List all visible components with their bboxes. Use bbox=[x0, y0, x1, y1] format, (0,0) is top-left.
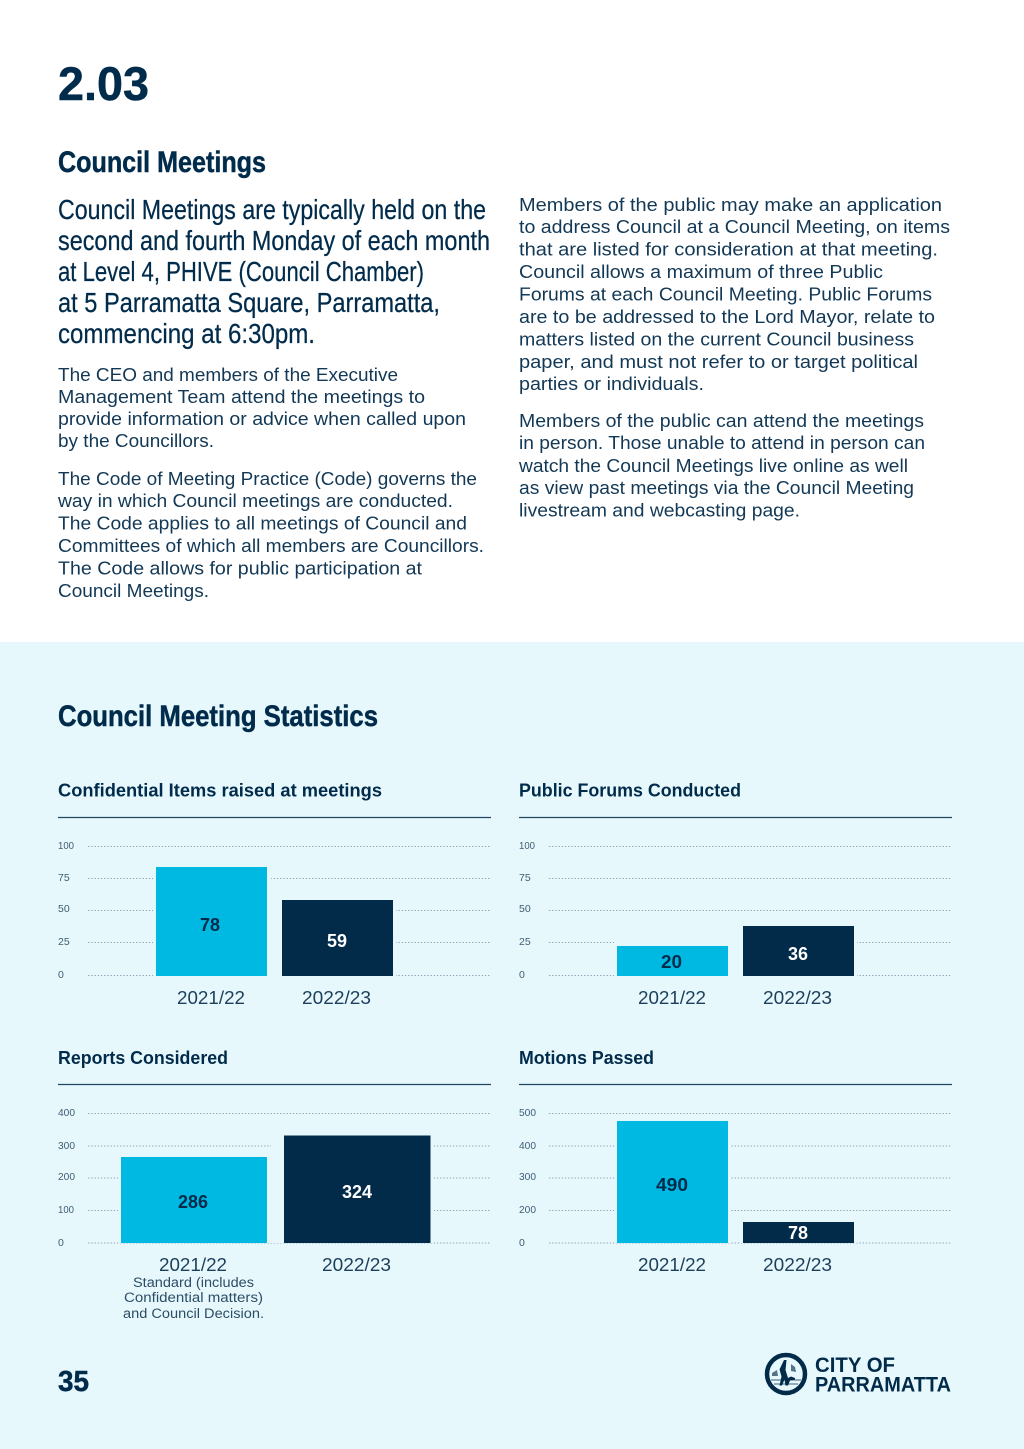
chart footnote bbox=[123, 1275, 264, 1321]
y axis labels: 75 bbox=[58, 872, 70, 884]
bar: 2022/23 value 324 bbox=[284, 1136, 430, 1243]
text block: public forums paragraph: parties or individuals. bbox=[519, 373, 704, 394]
bar: 2021/22 value 286 bbox=[121, 1157, 267, 1243]
chart footnote: Standard (includes bbox=[133, 1275, 254, 1290]
bar: 2022/23 value 59: 59 bbox=[327, 930, 347, 951]
text block: code of meeting practice paragraph: The Code of Meeting Practice (Code) governs the bbox=[58, 468, 477, 489]
text block: lead paragraph: second and fourth Monday of each month bbox=[58, 225, 490, 256]
text block: code of meeting practice paragraph: Council Meetings. bbox=[58, 580, 209, 601]
panel: Motions Passed chart bbox=[519, 1047, 952, 1275]
bar: 2021/22 value 78: 78 bbox=[200, 914, 220, 935]
text block: attendance paragraph: watch the Council Meetings live online as well bbox=[518, 455, 908, 476]
bar: 2022/23 value 78: 78 bbox=[788, 1222, 808, 1243]
bar: 2021/22 value 20 bbox=[617, 946, 728, 976]
bar: 2021/22 value 20: 20 bbox=[661, 951, 682, 972]
x axis labels bbox=[638, 1254, 832, 1275]
y axis labels bbox=[519, 840, 535, 981]
y axis labels: 100 bbox=[519, 840, 535, 852]
x axis labels: 2022/23 bbox=[302, 987, 371, 1008]
text block: code of meeting practice paragraph: way in which Council meetings are conducted. bbox=[57, 490, 453, 511]
y axis labels: 500 bbox=[519, 1107, 536, 1119]
panel: Confidential Items chart bbox=[58, 780, 491, 1008]
panel: Public Forums chart bbox=[519, 780, 952, 1008]
chart title: Public Forums Conducted bbox=[519, 780, 741, 800]
chart footnote: Confidential matters) bbox=[124, 1290, 263, 1305]
page number: 35 bbox=[58, 1366, 89, 1398]
chart title: Reports Considered bbox=[58, 1047, 228, 1068]
text block: attendance paragraph: as view past meetings via the Council Meeting bbox=[519, 477, 914, 498]
text block: code of meeting practice paragraph bbox=[57, 468, 484, 601]
bar: 2022/23 value 36: 36 bbox=[788, 943, 808, 964]
x axis labels: 2021/22 bbox=[638, 1254, 706, 1275]
y axis labels: 75 bbox=[519, 872, 531, 884]
text block: public forums paragraph: paper, and must not refer to or target political bbox=[519, 351, 918, 372]
bar: 2022/23 value 324: 324 bbox=[342, 1181, 373, 1202]
logo: City of Parramatta bbox=[767, 1354, 951, 1396]
text block: code of meeting practice paragraph: The Code allows for public participation at bbox=[58, 558, 422, 578]
bar: 2022/23 value 59 bbox=[282, 900, 393, 976]
text block: lead paragraph bbox=[58, 194, 490, 349]
x axis labels: 2022/23 bbox=[763, 1254, 832, 1275]
logo wordmark: PARRAMATTA bbox=[815, 1374, 951, 1396]
y axis labels: 400 bbox=[58, 1107, 75, 1119]
logo wordmark: CITY OF bbox=[815, 1354, 895, 1377]
text block: public forums paragraph: are to be addressed to the Lord Mayor, relate to bbox=[519, 306, 935, 327]
heading: Council Meetings: Council Meetings bbox=[58, 146, 266, 179]
y axis labels bbox=[58, 1107, 75, 1249]
y axis labels: 50 bbox=[58, 903, 70, 915]
text block: lead paragraph: Council Meetings are typically held on the bbox=[58, 194, 486, 225]
icon: city crest bbox=[767, 1355, 805, 1393]
y axis labels: 25 bbox=[519, 936, 531, 948]
section number: 2.03 bbox=[58, 57, 149, 110]
heading: Council Meeting Statistics: Council Meeting Statistics bbox=[58, 700, 378, 733]
y axis labels: 100 bbox=[58, 840, 74, 852]
text block: public forums paragraph: to address Council at a Council Meeting, on items bbox=[519, 216, 950, 237]
y axis labels: 25 bbox=[58, 936, 70, 948]
text block: public forums paragraph: Forums at each Council Meeting. Public Forums bbox=[519, 284, 932, 304]
text block: executive team paragraph: The CEO and members of the Executive bbox=[58, 364, 398, 385]
x axis labels: 2021/22 bbox=[159, 1254, 227, 1275]
x axis labels bbox=[159, 1254, 391, 1275]
y axis labels: 200 bbox=[519, 1204, 536, 1216]
bar: 2021/22 value 490 bbox=[617, 1121, 728, 1243]
chart footnote: and Council Decision. bbox=[123, 1306, 264, 1321]
y axis labels: 300 bbox=[58, 1140, 75, 1152]
text block: executive team paragraph: by the Councillors. bbox=[58, 430, 214, 451]
bar: 2021/22 value 78 bbox=[156, 867, 267, 976]
text block: lead paragraph: at Level 4, PHIVE (Council Chamber) bbox=[58, 256, 424, 287]
text block: attendance paragraph bbox=[518, 410, 925, 520]
y axis labels: 0 bbox=[58, 1237, 64, 1249]
y axis labels: 50 bbox=[519, 903, 531, 915]
y axis labels bbox=[58, 840, 74, 981]
chart title: Motions Passed bbox=[519, 1047, 654, 1068]
y axis labels: 0 bbox=[58, 969, 64, 981]
text block: public forums paragraph: matters listed on the current Council business bbox=[519, 328, 914, 350]
text block: lead paragraph: commencing at 6:30pm. bbox=[58, 318, 315, 349]
y axis labels bbox=[519, 1107, 536, 1249]
text block: public forums paragraph: that are listed for consideration at that meeting. bbox=[519, 238, 938, 260]
y axis labels: 300 bbox=[519, 1171, 536, 1183]
x axis labels: 2021/22 bbox=[177, 987, 245, 1008]
text block: attendance paragraph: in person. Those unable to attend in person can bbox=[519, 432, 925, 453]
x axis labels bbox=[177, 987, 371, 1008]
x axis labels: 2021/22 bbox=[638, 987, 706, 1008]
text block: attendance paragraph: Members of the public can attend the meetings bbox=[519, 410, 924, 431]
chart title: Confidential Items raised at meetings bbox=[58, 780, 382, 800]
text block: public forums paragraph bbox=[519, 194, 950, 394]
text block: attendance paragraph: livestream and webcasting page. bbox=[519, 500, 800, 520]
text block: public forums paragraph: Members of the public may make an application bbox=[519, 194, 942, 215]
logo wordmark bbox=[815, 1354, 951, 1396]
y axis labels: 400 bbox=[519, 1140, 536, 1152]
y axis labels: 0 bbox=[519, 969, 525, 981]
text block: lead paragraph: at 5 Parramatta Square, Parramatta, bbox=[58, 287, 440, 318]
y axis labels: 100 bbox=[58, 1204, 74, 1216]
y axis labels: 0 bbox=[519, 1237, 525, 1249]
panel: Reports Considered chart bbox=[58, 1047, 491, 1321]
panel: statistics background bbox=[0, 642, 1024, 1449]
bar: 2022/23 value 36 bbox=[743, 926, 854, 976]
bar: 2021/22 value 286: 286 bbox=[178, 1191, 208, 1212]
text block: public forums paragraph: Council allows a maximum of three Public bbox=[519, 261, 883, 282]
text block: executive team paragraph: provide information or advice when called upon bbox=[58, 408, 466, 429]
text block: executive team paragraph bbox=[58, 364, 466, 451]
text block: code of meeting practice paragraph: Committees of which all members are Councillors. bbox=[58, 535, 484, 556]
bar: 2022/23 value 78 bbox=[743, 1222, 854, 1243]
bar: 2021/22 value 490: 490 bbox=[656, 1174, 688, 1195]
x axis labels bbox=[638, 987, 832, 1008]
text block: code of meeting practice paragraph: The Code applies to all meetings of Council and bbox=[58, 512, 467, 534]
x axis labels: 2022/23 bbox=[322, 1254, 391, 1275]
y axis labels: 200 bbox=[58, 1171, 75, 1183]
x axis labels: 2022/23 bbox=[763, 987, 832, 1008]
text block: executive team paragraph: Management Team attend the meetings to bbox=[58, 386, 425, 407]
